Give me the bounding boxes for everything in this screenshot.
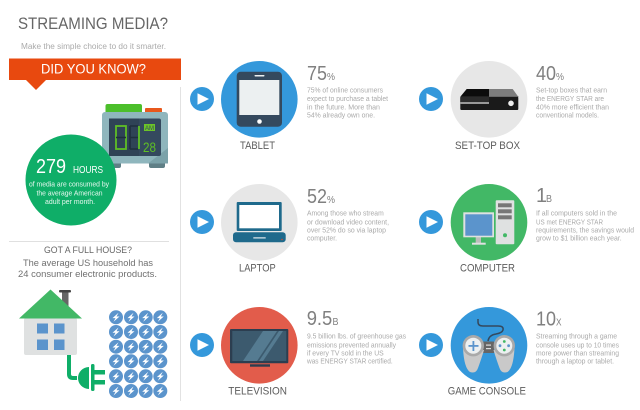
play button: television	[190, 333, 214, 357]
callout: 279 hours: of media are consumed by	[29, 180, 109, 188]
panel: set-top box	[419, 61, 609, 152]
description: computer: grow to $1 billion each year.	[536, 236, 622, 243]
panel: game console	[419, 307, 619, 398]
description: computer: requirements, the savings would	[536, 228, 634, 235]
panel: laptop	[190, 184, 389, 275]
callout: 279 hours	[26, 134, 116, 226]
description: computer: US met ENERGY STAR	[536, 219, 603, 226]
icon: alarm clock: AM	[145, 126, 154, 132]
label: computer: COMPUTER	[460, 263, 515, 275]
description: game console	[536, 333, 619, 366]
stat: 75%: 75	[307, 63, 327, 85]
description: set-top box: Set-top boxes that earn	[536, 88, 607, 95]
text block: full house: 24 consumer electronic products.	[18, 269, 157, 280]
text block: full house: The average US household has	[23, 258, 153, 269]
icon: game console	[451, 307, 527, 384]
description: game console: more power than streaming	[536, 350, 619, 357]
label: game console: GAME CONSOLE	[448, 386, 526, 398]
icon grid: 24 electronic products	[109, 310, 167, 398]
text block: full house: GOT A FULL HOUSE?	[44, 245, 132, 255]
panel: television	[190, 307, 406, 398]
callout: 279 hours: adult per month.	[45, 197, 95, 206]
description: television: if every TV sold in the US	[307, 350, 384, 357]
banner: did you know	[9, 58, 181, 90]
panel: tablet	[190, 61, 388, 152]
description: television	[306, 333, 406, 366]
description: set-top box: conventional models.	[536, 113, 599, 120]
stat: 40%: 40	[536, 63, 556, 85]
subtitle: Make the simple choice to do it smarter.	[21, 42, 166, 51]
play button: tablet	[190, 87, 214, 111]
description: television: emissions prevented annually	[307, 342, 396, 349]
description: laptop: Among those who stream	[307, 211, 384, 218]
stat: 10x: X	[556, 318, 562, 329]
stat: 1B: 1	[536, 185, 547, 207]
label: set-top box: SET-TOP BOX	[455, 140, 521, 152]
stat: 9.5B: 9.5	[307, 308, 332, 330]
description: tablet	[307, 88, 388, 120]
label: tablet: TABLET	[240, 140, 275, 152]
callout: 279 hours: the average American	[36, 188, 102, 198]
play button: game console	[419, 333, 443, 357]
description: tablet: 75% of online consumers	[307, 88, 383, 95]
label: television: TELEVISION	[228, 386, 287, 398]
description: set-top box: the ENERGY STAR are	[536, 96, 604, 103]
description: laptop: or download video content,	[307, 219, 389, 226]
stat: 40%: %	[556, 72, 564, 83]
icon: television	[221, 307, 298, 384]
description: game console: console uses up to 10 times	[536, 342, 619, 349]
stat: 52%: 52	[307, 186, 327, 208]
panel: computer	[419, 184, 634, 275]
icon: computer	[451, 184, 527, 261]
description: television: 9.5 billion lbs. of greenhouse gas	[307, 333, 406, 340]
banner: did you know: DID YOU KNOW?	[41, 62, 146, 76]
description: television: was ENERGY STAR certified.	[306, 359, 393, 366]
description: game console: Streaming through a game	[536, 333, 617, 340]
play button: set-top box	[419, 87, 443, 111]
description: laptop	[307, 211, 389, 243]
stat: 1B: B	[546, 194, 552, 205]
icon: alarm clock: 28	[143, 139, 156, 155]
icon: set-top box	[451, 61, 527, 138]
play button: computer	[419, 210, 443, 234]
stat: 1B	[536, 185, 552, 207]
icon: house with plug	[19, 290, 105, 391]
icon: tablet	[221, 61, 298, 138]
description: game console: through a laptop or tablet.	[536, 359, 614, 366]
stat: 9.5B: B	[332, 317, 339, 328]
description: set-top box	[536, 88, 609, 120]
text block: full house	[18, 245, 157, 280]
callout: 279 hours: 279	[36, 156, 66, 178]
description: tablet: 54% already own one.	[307, 113, 375, 120]
icon: alarm clock	[102, 104, 168, 168]
label: laptop: LAPTOP	[239, 263, 276, 275]
description: laptop: over 52% do so via laptop	[307, 228, 386, 235]
icon: laptop	[221, 184, 298, 261]
play button: laptop	[190, 210, 214, 234]
description: laptop: computer.	[307, 236, 337, 243]
stat: 52%: %	[327, 195, 335, 206]
description: set-top box: 40% more efficient than	[536, 104, 609, 111]
stat: 75%: %	[327, 72, 335, 83]
title: STREAMING MEDIA?	[18, 14, 168, 33]
description: tablet: expect to purchase a tablet	[307, 96, 388, 103]
stat: 10x: 10	[536, 309, 556, 331]
description: computer	[536, 211, 634, 243]
description: computer: If all computers sold in the	[536, 211, 617, 218]
description: tablet: in the future. More than	[307, 104, 380, 111]
callout: 279 hours: HOURS	[73, 165, 103, 176]
